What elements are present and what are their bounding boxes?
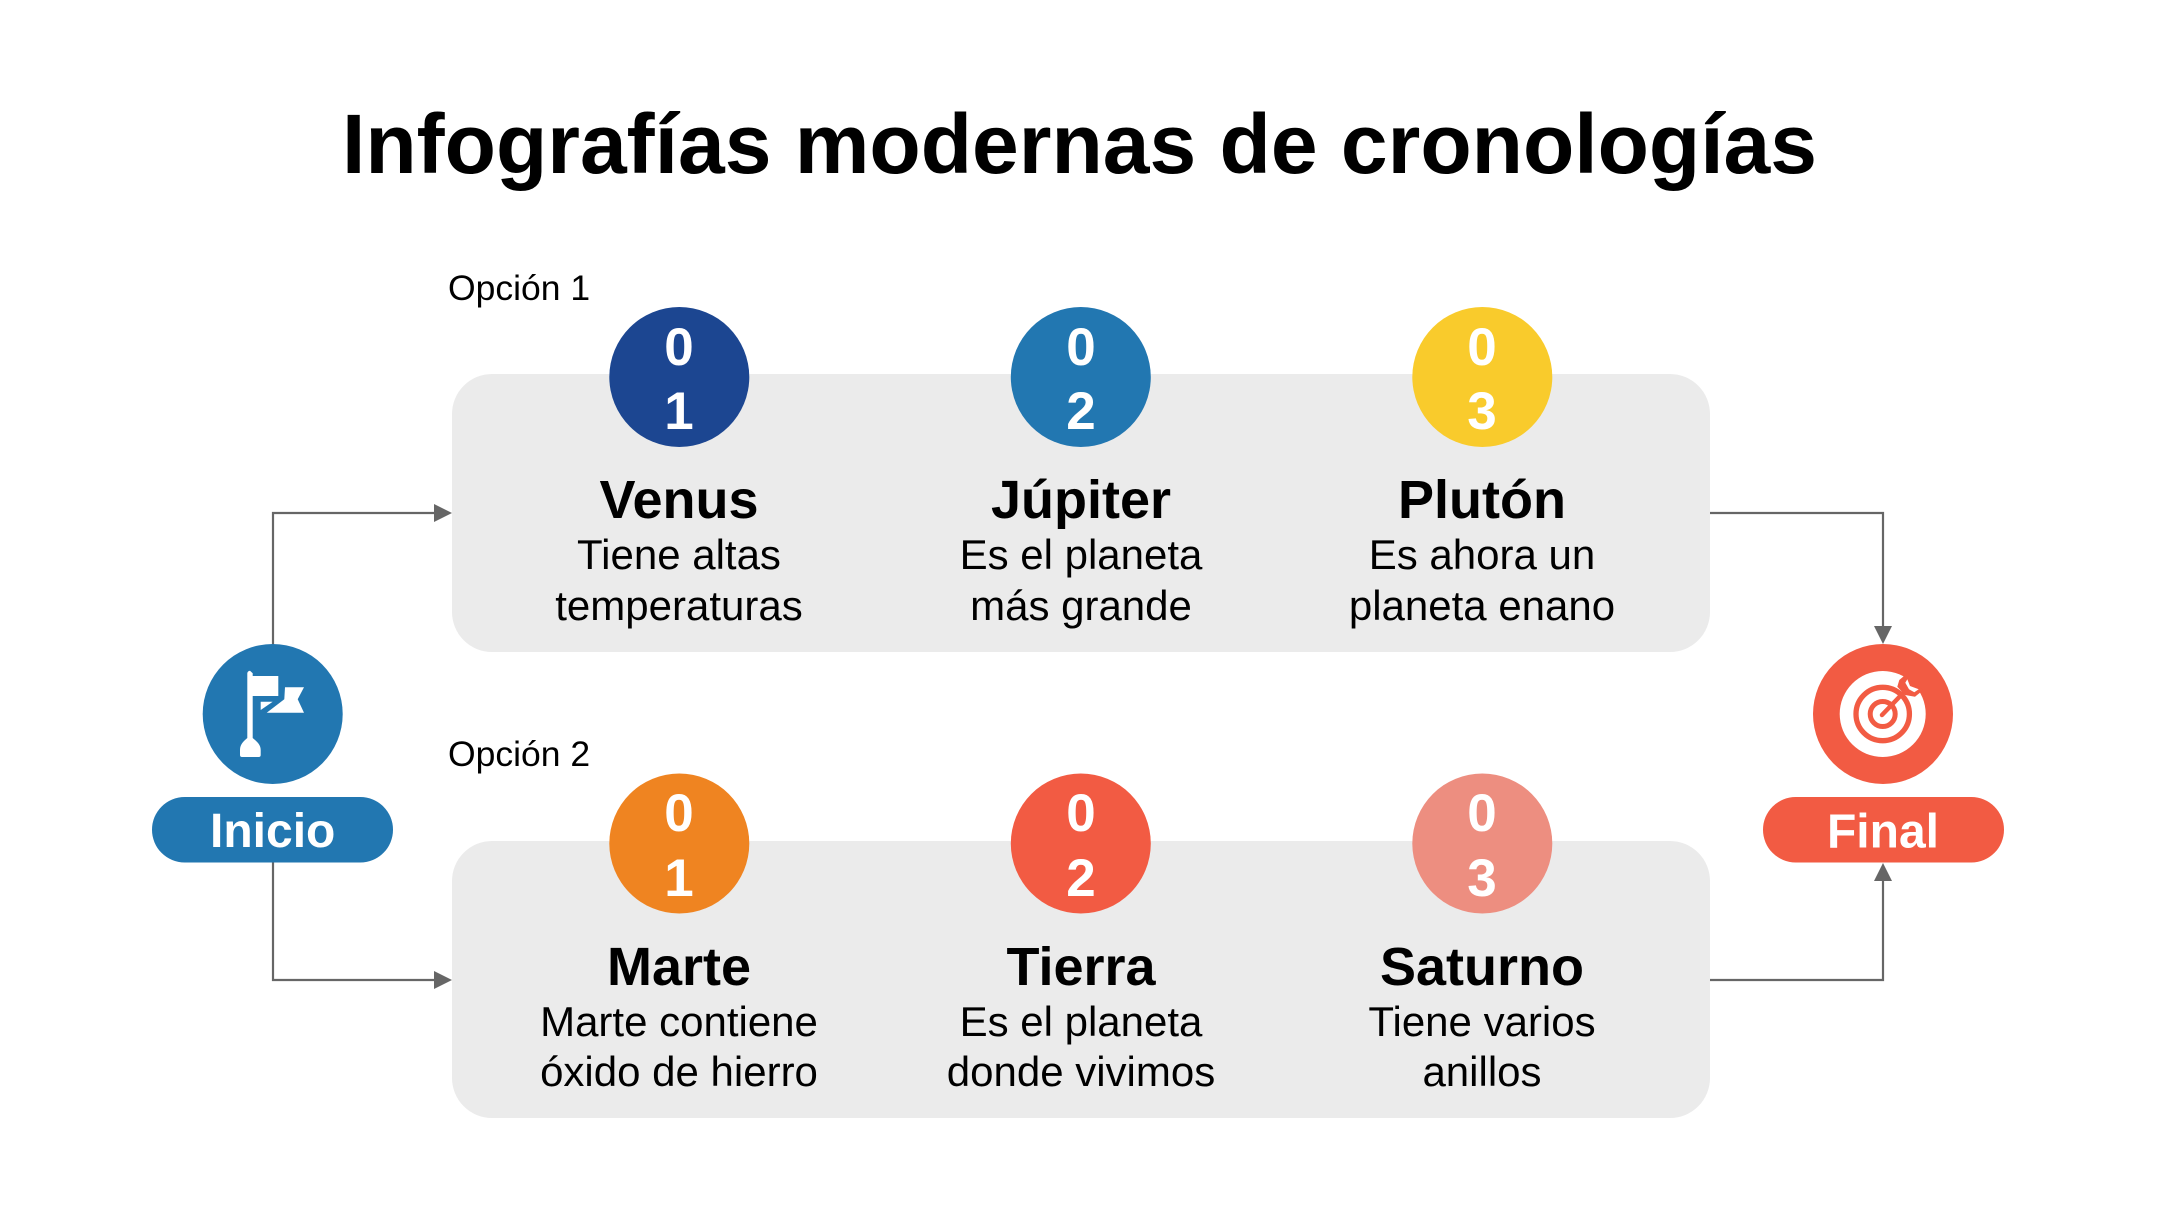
- step: saturno: [1368, 774, 1596, 1095]
- text: venus: Venus: [599, 470, 759, 530]
- text: venus: temperaturas: [555, 582, 803, 629]
- badge 02 red: 0: [1066, 784, 1096, 843]
- text: tierra: Es el planeta: [960, 998, 1203, 1045]
- step: venus: [555, 307, 803, 629]
- badge 03 salmon: 3: [1467, 849, 1497, 908]
- icon: target on red circle: [1813, 644, 1953, 784]
- badge 02 blue: [1011, 307, 1151, 447]
- label: option 1: Opción 1: [448, 268, 590, 308]
- badge 03 salmon: 0: [1467, 784, 1497, 843]
- text: tierra: [947, 937, 1215, 1095]
- arrow: inicio to option 2: [273, 862, 452, 989]
- text: jupiter: Júpiter: [991, 470, 1171, 530]
- text: tierra: Tierra: [1006, 937, 1157, 997]
- text: saturno: Saturno: [1380, 937, 1584, 997]
- text: marte: Marte: [607, 937, 751, 997]
- pill: final: [1763, 797, 2004, 862]
- step: jupiter: [960, 307, 1203, 629]
- icon: flags on blue circle: [203, 644, 343, 784]
- text: pluton: Plutón: [1398, 470, 1566, 530]
- badge 03 yellow: 3: [1467, 382, 1497, 441]
- step: pluton: [1349, 307, 1615, 629]
- text: tierra: donde vivimos: [947, 1048, 1215, 1095]
- step: tierra: [947, 774, 1215, 1095]
- text: pluton: planeta enano: [1349, 582, 1615, 629]
- badge 01 navy: [609, 307, 749, 447]
- text: jupiter: más grande: [970, 582, 1192, 629]
- badge 03 yellow: 0: [1467, 318, 1497, 377]
- text: saturno: anillos: [1422, 1048, 1542, 1095]
- badge 02 blue: 2: [1066, 382, 1096, 441]
- text: jupiter: Es el planeta: [960, 531, 1203, 578]
- text: pluton: Es ahora un: [1369, 531, 1595, 578]
- badge 03 salmon: [1412, 774, 1552, 914]
- badge 01 orange: 0: [664, 784, 694, 843]
- text: venus: Tiene altas: [577, 531, 781, 578]
- text: pluton: [1349, 470, 1615, 629]
- pill: inicio: Inicio: [210, 805, 335, 858]
- text: saturno: [1368, 937, 1596, 1095]
- step: marte: [540, 774, 818, 1095]
- text: marte: [540, 937, 818, 1095]
- text: jupiter: [960, 470, 1203, 629]
- label: option 2: Opción 2: [448, 734, 590, 774]
- pill: final: Final: [1827, 806, 1939, 858]
- badge 01 navy: 0: [664, 318, 694, 377]
- badge 01 orange: [609, 774, 749, 914]
- badge 01 orange: 1: [664, 849, 694, 908]
- text: saturno: Tiene varios: [1368, 998, 1596, 1045]
- text: marte: Marte contiene: [540, 998, 818, 1045]
- text: venus: [555, 470, 803, 629]
- text: marte: óxido de hierro: [540, 1048, 818, 1095]
- panel: option 1: [452, 374, 1710, 652]
- title: Infografías modernas de cronologías: [342, 97, 1817, 191]
- arrow: option 1 to final: [1710, 513, 1892, 644]
- badge 02 blue: 0: [1066, 318, 1096, 377]
- panel: option 2: [452, 841, 1710, 1118]
- arrow: inicio to option 1: [273, 504, 452, 645]
- badge 01 navy: 1: [664, 382, 694, 441]
- pill: inicio: [152, 797, 393, 862]
- badge 02 red: 2: [1066, 849, 1096, 908]
- badge 02 red: [1011, 774, 1151, 914]
- badge 03 yellow: [1412, 307, 1552, 447]
- arrow: option 2 to final: [1710, 863, 1892, 980]
